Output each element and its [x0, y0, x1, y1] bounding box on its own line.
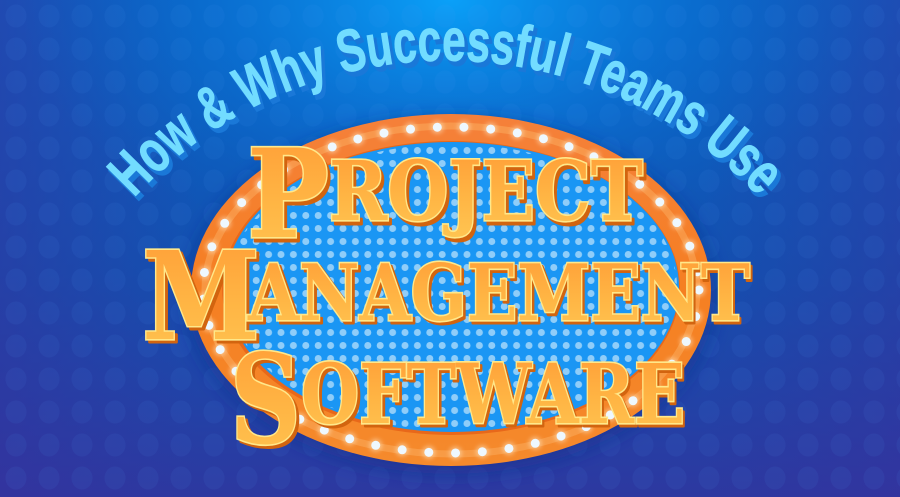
- title: Project: ROJECT: [332, 148, 646, 244]
- orange ring: [191, 114, 711, 466]
- curved heading: How & Why Successful Teams Use: [106, 24, 778, 196]
- title: Software: OFTWARE: [304, 350, 687, 446]
- dotted panel: [225, 142, 679, 432]
- title: Management: M: [142, 224, 260, 368]
- title: Software: S: [233, 331, 304, 476]
- title: Management: ANAGEMENT: [250, 251, 752, 342]
- title: Software: [230, 328, 687, 476]
- title: Management: ANAGEMENT: [247, 248, 750, 339]
- curved heading: How & Why Successful Teams Use: [108, 28, 781, 202]
- title: Project: ROJECT: [329, 144, 643, 240]
- title: Project: P: [250, 127, 332, 271]
- title: Project: P: [247, 123, 329, 267]
- title: Project: P: [247, 123, 329, 267]
- title: Project: ROJECT: [329, 144, 643, 240]
- ring lights: [203, 127, 699, 453]
- title: Management: M: [145, 227, 263, 371]
- title: Management: ANAGEMENT: [247, 248, 750, 339]
- marquee oval sign: [187, 114, 715, 474]
- title: Management: [142, 224, 752, 371]
- title: Project: [247, 123, 646, 271]
- title: Management: M: [142, 224, 260, 368]
- title: Software: OFTWARE: [301, 347, 685, 443]
- title: Software: S: [230, 328, 301, 473]
- title: Software: OFTWARE: [301, 347, 685, 443]
- title: Software: S: [230, 328, 301, 473]
